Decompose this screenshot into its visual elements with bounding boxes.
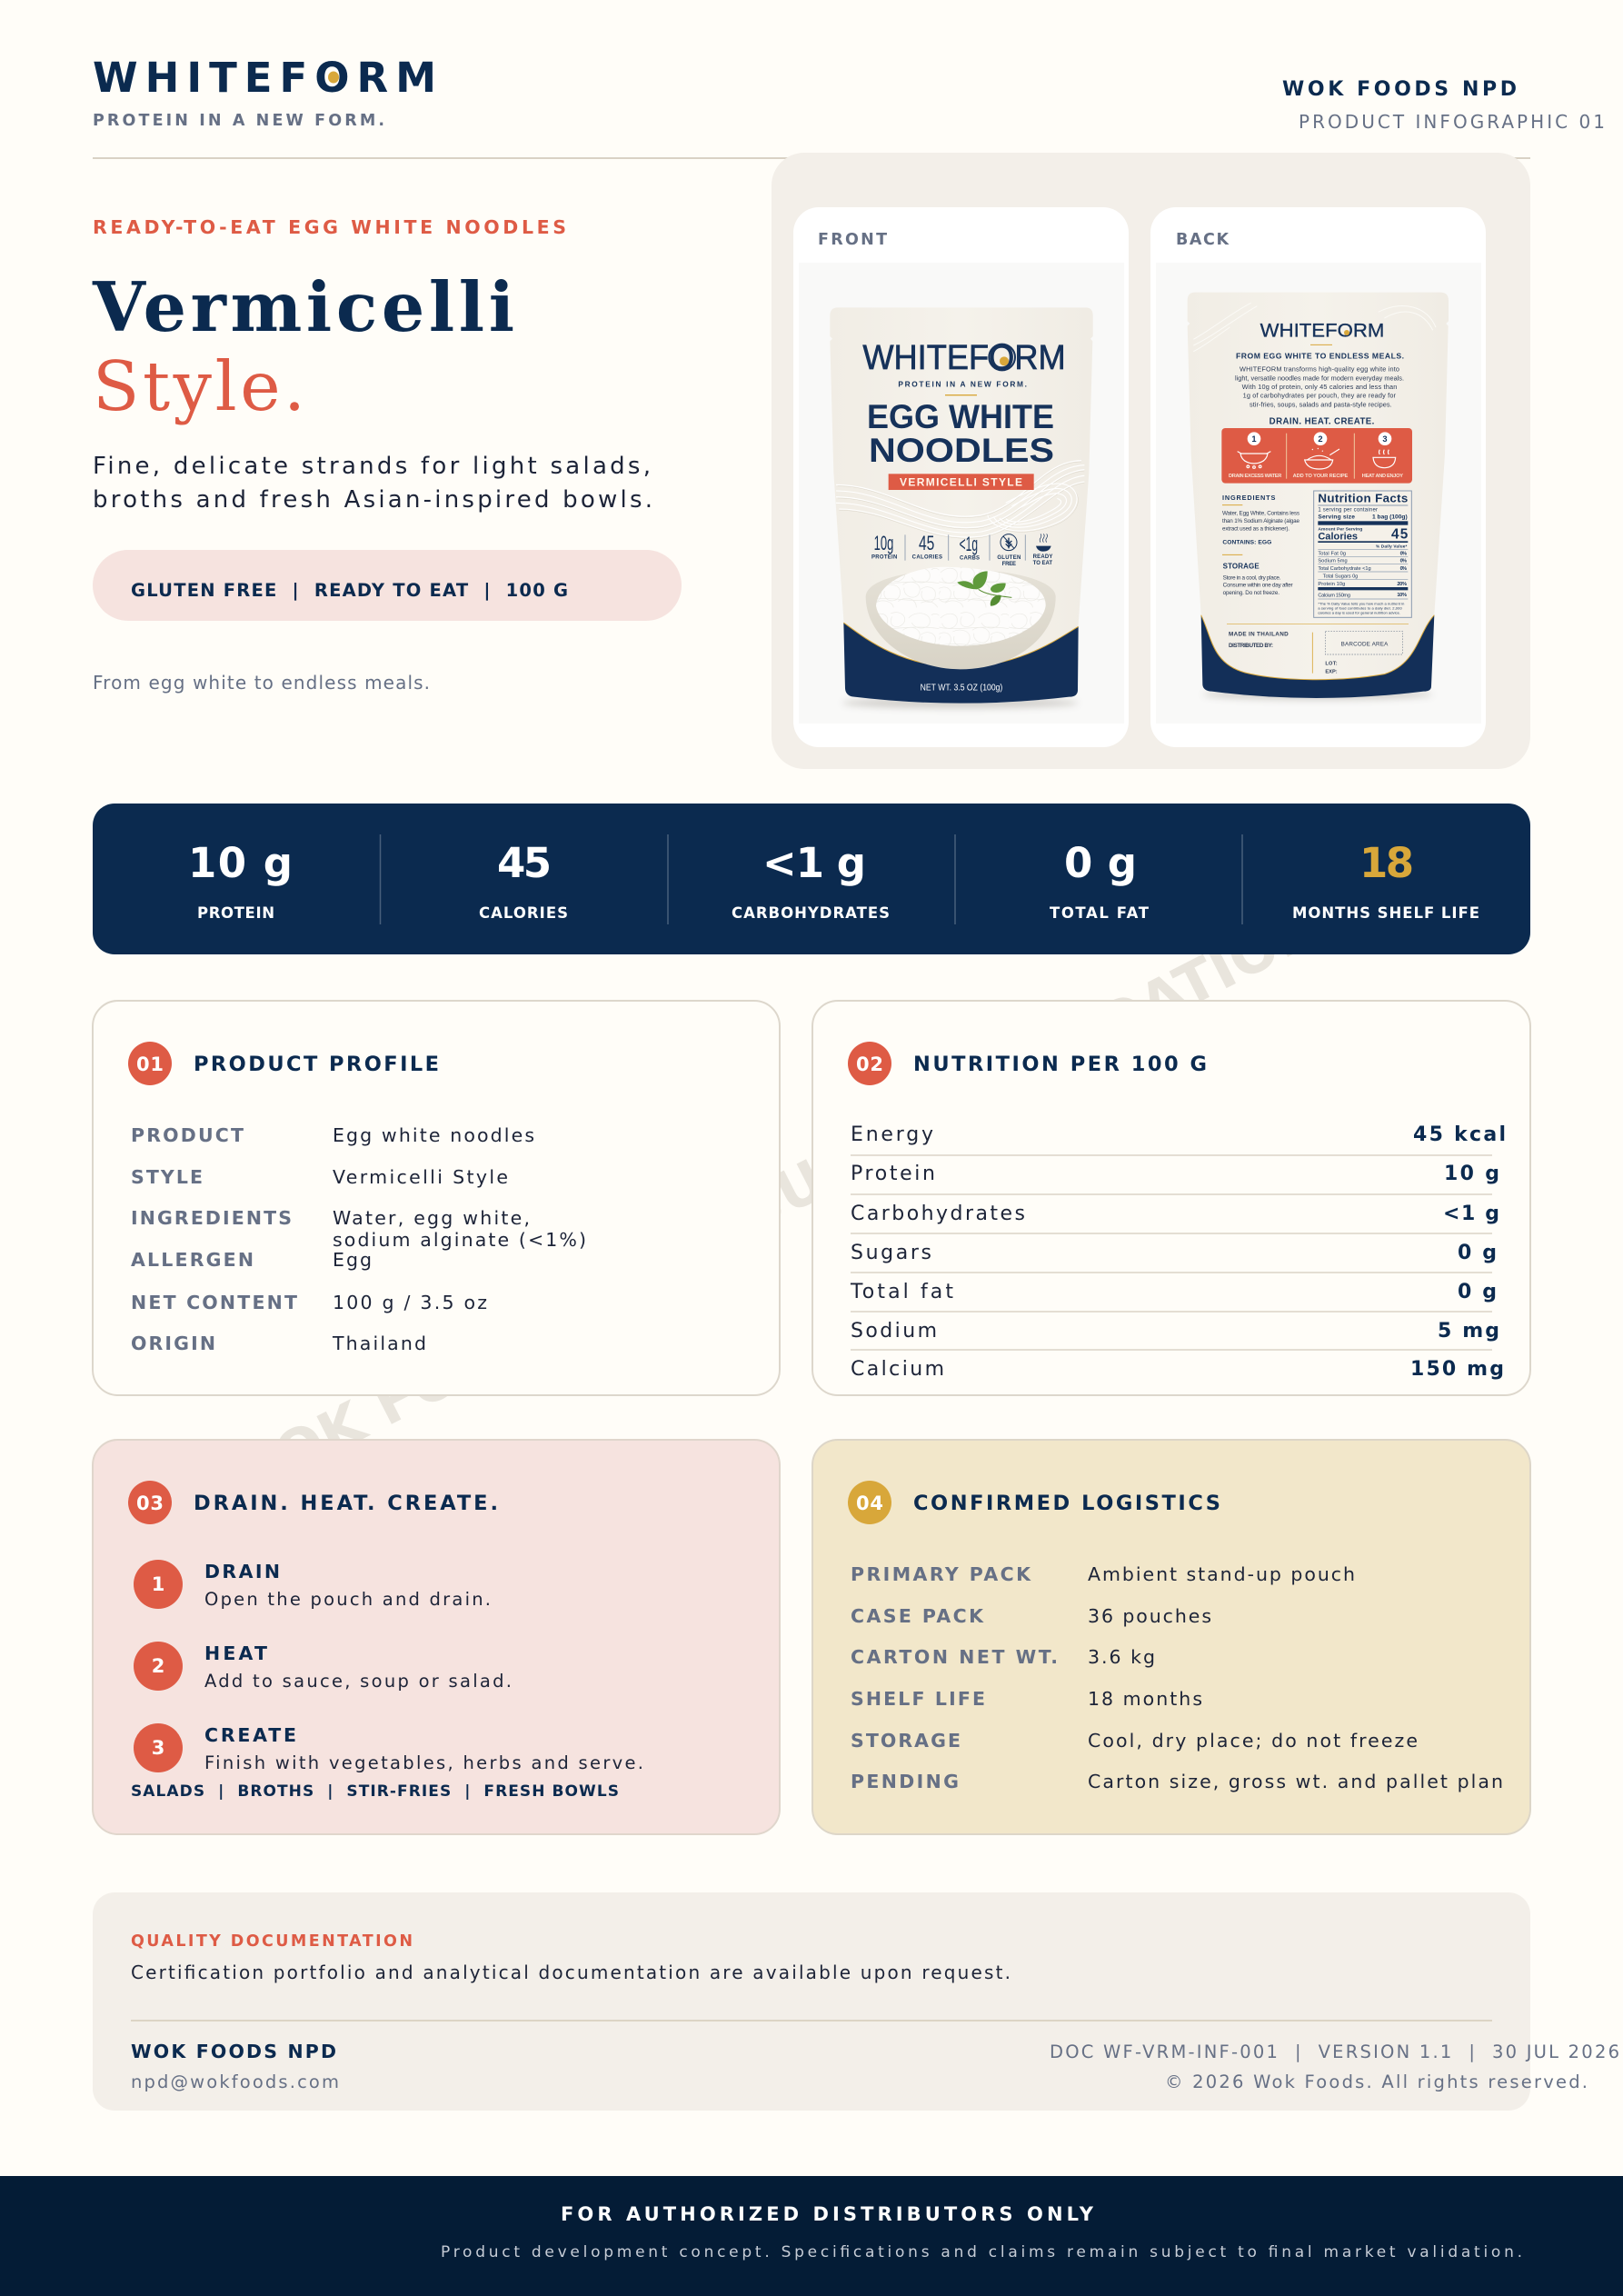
profile rows: ORIGIN	[131, 1333, 215, 1354]
logistics rows: 36 pouches	[1088, 1605, 1211, 1627]
step 2: Add to sauce, soup or salad.	[204, 1671, 512, 1692]
company contact	[131, 2041, 339, 2092]
panel: logistics	[812, 1440, 1530, 1834]
watermark	[209, 891, 1331, 1517]
nutrition facts label: 1 serving per container	[1318, 508, 1378, 514]
ingredients and storage: extract used as a thickener).	[1222, 525, 1289, 532]
heading: CONFIRMED LOGISTICS	[913, 1492, 1220, 1515]
pack base info: LOT:	[1325, 662, 1338, 667]
stat: carbohydrates: CARBOHYDRATES	[732, 904, 890, 922]
logistics rows: CASE PACK	[851, 1605, 984, 1627]
nutrition facts label: Nutrition Facts	[1318, 492, 1408, 505]
stat: protein: PROTEIN	[197, 904, 274, 922]
stat: protein	[188, 839, 293, 922]
nutrition table: 45 kcal	[1413, 1123, 1506, 1146]
heading: PRODUCT PROFILE	[194, 1053, 439, 1076]
profile rows: Vermicelli Style	[333, 1166, 508, 1188]
header brand: WHITEFORM	[93, 54, 436, 102]
nutrition table: 150 mg	[1410, 1358, 1504, 1381]
ingredients and storage: than 1% Sodium Alginate (algae	[1222, 518, 1299, 524]
nutrition facts label: 0%	[1400, 566, 1407, 572]
preparation strip: 3	[1382, 434, 1388, 444]
attribute pill	[93, 550, 682, 621]
quality text: Certification portfolio and analytical documentation are available upon request.	[131, 1962, 1011, 1983]
heading: NUTRITION PER 100 G	[913, 1053, 1207, 1076]
logistics rows: PRIMARY PACK	[851, 1563, 1031, 1585]
badge 04	[848, 1481, 891, 1524]
hero text: READY-TO-EAT EGG WHITE NOODLES	[93, 216, 566, 238]
step 3: 3	[152, 1737, 164, 1759]
step 2	[134, 1642, 512, 1692]
card: back: BACK	[1176, 231, 1230, 249]
step 1: DRAIN	[204, 1561, 280, 1582]
stat: total fat	[1050, 839, 1150, 922]
heading: DRAIN. HEAT. CREATE.	[194, 1492, 498, 1515]
hero tagline: From egg white to endless meals.	[93, 672, 430, 694]
preparation strip: 2	[1318, 434, 1323, 444]
ingredients and storage: STORAGE	[1223, 562, 1260, 570]
back pouch: WHITEFORM	[1260, 319, 1384, 342]
nutrition facts label: *The % Daily Value tells you how much a nutrient in	[1318, 601, 1404, 605]
header right label: WOK FOODS NPD	[1282, 78, 1517, 101]
front pouch	[830, 307, 1093, 708]
logo: WHITEFORM	[862, 338, 1066, 376]
footer band: Product development concept. Specifications and claims remain subject to final market validation.	[441, 2243, 1522, 2261]
stat: calories: CALORIES	[479, 904, 568, 922]
header brand	[93, 54, 436, 130]
ingredients and storage: Store in a cool, dry place.	[1223, 574, 1281, 581]
badge 01	[128, 1042, 172, 1085]
hero text	[92, 216, 652, 514]
nutrition table: Energy	[851, 1123, 933, 1146]
profile rows: sodium alginate (<1%)	[333, 1229, 586, 1251]
ingredients and storage: Water, Egg White, Contains less	[1222, 511, 1299, 517]
nutrition table: Protein	[851, 1163, 935, 1185]
front pouch: NET WT. 3.5 OZ (100g)	[921, 683, 1002, 693]
nutrition table: Total fat	[850, 1281, 953, 1303]
profile rows	[131, 1124, 586, 1354]
profile rows: Egg	[333, 1249, 372, 1271]
preparation strip: HEAT AND ENJOY	[1362, 474, 1403, 479]
document info	[1050, 2041, 1619, 2092]
preparation strip	[1221, 428, 1412, 484]
logistics rows: PENDING	[851, 1771, 959, 1792]
step 1	[134, 1560, 491, 1610]
pack base info: EXP:	[1325, 669, 1338, 674]
noodle bowl	[866, 567, 1056, 669]
pack claims: TO EAT	[1033, 561, 1052, 566]
profile rows: Thailand	[332, 1333, 426, 1354]
stat: shelf life: MONTHS SHELF LIFE	[1292, 904, 1479, 922]
step 1: 1	[152, 1573, 164, 1595]
logistics rows: Carton size, gross wt. and pallet plan	[1088, 1771, 1503, 1792]
logistics rows	[851, 1563, 1503, 1792]
pack claims: PROTEIN	[871, 555, 897, 561]
preparation strip: ADD TO YOUR RECIPE	[1293, 474, 1349, 479]
ingredients and storage: Consume within one day after	[1223, 583, 1293, 589]
front pouch: EGG WHITE	[867, 398, 1054, 435]
nutrition facts label: % Daily Value*	[1376, 544, 1408, 548]
pack base info: BARCODE AREA	[1341, 641, 1389, 647]
stat: calories	[479, 839, 568, 922]
stat: shelf life	[1292, 839, 1479, 922]
key stats bar	[93, 804, 1530, 954]
profile rows: 100 g / 3.5 oz	[333, 1292, 487, 1313]
nutrition facts label: Calcium 150mg	[1318, 594, 1350, 599]
nutrition facts label	[1314, 491, 1411, 617]
ingredients and storage: opening. Do not freeze.	[1223, 590, 1279, 596]
stat: total fat: TOTAL FAT	[1050, 904, 1150, 922]
footer band: FOR AUTHORIZED DISTRIBUTORS ONLY	[561, 2203, 1094, 2225]
badge 03	[128, 1481, 172, 1524]
front pouch: PROTEIN IN A NEW FORM.	[898, 380, 1027, 389]
front pouch: NOODLES	[869, 432, 1054, 469]
ingredients and storage: CONTAINS: EGG	[1222, 539, 1271, 545]
ingredients and storage: INGREDIENTS	[1222, 494, 1275, 502]
step 2: HEAT	[204, 1642, 267, 1664]
nutrition facts label: Calories	[1318, 532, 1358, 543]
pack claims: 45	[919, 532, 934, 554]
hero text: broths and fresh Asian-inspired bowls.	[93, 486, 652, 514]
pack claims: FREE	[1002, 562, 1016, 567]
hero text: Style.	[93, 346, 305, 426]
nutrition facts label: Total Carbohydrate <1g	[1318, 566, 1371, 572]
back copy: WHITEFORM transforms high-quality egg white into	[1240, 364, 1399, 373]
step 3: Finish with vegetables, herbs and serve.	[204, 1752, 643, 1773]
preparation strip: 1	[1251, 434, 1257, 444]
nutrition facts label: Amount Per Serving	[1318, 527, 1362, 533]
panel: quality documentation	[93, 1892, 1619, 2111]
nutrition facts label: Total Fat 0g	[1318, 552, 1346, 557]
noodle waves	[838, 462, 1084, 538]
pack claims: GLUTEN	[997, 555, 1021, 561]
nutrition table	[850, 1123, 1506, 1381]
document info: © 2026 Wok Foods. All rights reserved.	[1165, 2071, 1588, 2092]
nutrition table: Sugars	[851, 1242, 931, 1264]
nutrition facts label: Protein 10g	[1318, 582, 1345, 587]
stat: carbohydrates	[732, 839, 890, 922]
profile rows: PRODUCT	[131, 1124, 244, 1146]
badge 03: 03	[136, 1492, 164, 1514]
back copy: 1g of carbohydrates per pouch, they are ready for	[1243, 392, 1397, 400]
logistics rows: Ambient stand-up pouch	[1088, 1563, 1355, 1585]
header right label	[1282, 78, 1605, 133]
card: back	[1150, 207, 1486, 747]
step 2: 2	[152, 1655, 164, 1677]
header right label: PRODUCT INFOGRAPHIC 01	[1299, 111, 1605, 133]
pack claims: 10g	[874, 532, 893, 554]
pack claims: CALORIES	[912, 555, 942, 561]
panel: pack images	[772, 153, 1530, 769]
logistics rows: SHELF LIFE	[851, 1688, 985, 1710]
stat: calories: 45	[497, 839, 552, 887]
quality heading: QUALITY DOCUMENTATION	[131, 1932, 413, 1951]
nutrition facts label: 20%	[1397, 582, 1407, 587]
profile rows: NET CONTENT	[131, 1292, 297, 1313]
profile rows: INGREDIENTS	[131, 1207, 292, 1229]
profile rows: Egg white noodles	[333, 1124, 534, 1146]
logistics rows: Cool, dry place; do not freeze	[1088, 1730, 1418, 1752]
pack claims	[871, 532, 1052, 567]
logistics rows: 3.6 kg	[1088, 1646, 1155, 1668]
stat: protein: 10 g	[188, 839, 293, 887]
step 3	[134, 1723, 643, 1773]
panel: drain heat create	[93, 1440, 780, 1834]
footer band	[0, 2176, 1623, 2296]
hero text: Vermicelli	[92, 267, 514, 347]
nutrition table: Calcium	[851, 1358, 944, 1381]
nutrition table: Sodium	[851, 1320, 937, 1343]
watermark: VALIDATION	[962, 891, 1331, 1123]
nutrition facts label: 0%	[1400, 552, 1407, 557]
back pouch: DRAIN. HEAT. CREATE.	[1270, 417, 1375, 427]
nutrition table: Carbohydrates	[851, 1203, 1025, 1225]
nutrition facts label: 0%	[1400, 559, 1407, 564]
badge 02: 02	[856, 1053, 883, 1075]
header brand: PROTEIN IN A NEW FORM.	[93, 112, 384, 130]
back copy	[1235, 364, 1404, 409]
profile rows: ALLERGEN	[131, 1249, 254, 1271]
hero text: Fine, delicate strands for light salads,	[93, 453, 651, 480]
stat: carbohydrates: <1 g	[762, 839, 866, 887]
watermark: WOK FOODS	[209, 1279, 591, 1517]
pack base info	[1227, 624, 1409, 674]
nutrition facts label: 10%	[1397, 593, 1407, 598]
card: front: FRONT	[818, 231, 887, 249]
nutrition facts label: Serving size	[1318, 514, 1355, 520]
back copy: stir-fries, soups, salads and pasta-style recipes.	[1250, 401, 1392, 409]
nutrition facts label: 1 bag (100g)	[1372, 514, 1408, 520]
step 3: CREATE	[204, 1724, 296, 1746]
panel: product profile	[93, 1001, 780, 1395]
back copy: light, versatile noodles made for modern everyday meals.	[1235, 374, 1404, 382]
panel: nutrition	[812, 1001, 1530, 1395]
back copy: With 10g of protein, only 45 calories and less than	[1242, 383, 1397, 391]
pack base info: DISTRIBUTED BY:	[1229, 643, 1273, 649]
ingredients and storage	[1222, 494, 1299, 596]
back pouch: FROM EGG WHITE TO ENDLESS MEALS.	[1236, 352, 1404, 361]
logistics rows: 18 months	[1088, 1688, 1202, 1710]
profile rows: Water, egg white,	[333, 1207, 530, 1229]
nutrition table: 10 g	[1444, 1163, 1499, 1185]
pack base info: MADE IN THAILAND	[1229, 631, 1289, 637]
nutrition facts label: Sodium 5mg	[1318, 559, 1348, 564]
front pouch: VERMICELLI STYLE	[900, 475, 1022, 488]
step 1: Open the pouch and drain.	[204, 1589, 491, 1610]
badge 04: 04	[856, 1492, 883, 1514]
attribute pill: GLUTEN FREE | READY TO EAT | 100 G	[131, 580, 568, 601]
nutrition table: <1 g	[1443, 1203, 1499, 1225]
company contact: npd@wokfoods.com	[131, 2071, 339, 2092]
nutrition table: 0 g	[1458, 1281, 1497, 1303]
back pouch	[1188, 293, 1449, 700]
badge 02	[848, 1042, 891, 1085]
badge 01: 01	[136, 1053, 164, 1075]
stat: shelf life: 18	[1359, 839, 1414, 887]
pack claims: READY	[1033, 554, 1052, 560]
nutrition table: 0 g	[1458, 1242, 1497, 1264]
nutrition facts label: 45	[1391, 527, 1409, 543]
nutrition table: 5 mg	[1438, 1320, 1499, 1343]
watermark: SUBJECT TO	[729, 1015, 1092, 1244]
use cases: SALADS | BROTHS | STIR-FRIES | FRESH BOWLS	[131, 1782, 619, 1801]
nutrition facts label: calories a day is used for general nutrition advice.	[1318, 610, 1400, 614]
company contact: WOK FOODS NPD	[131, 2041, 336, 2062]
nutrition facts label: a serving of food contributes to a daily diet. 2,000	[1318, 605, 1402, 610]
card: front	[793, 207, 1129, 747]
preparation strip: DRAIN EXCESS WATER	[1229, 474, 1281, 479]
nutrition facts label: Total Sugars 0g	[1323, 574, 1358, 579]
pack claims: <1g	[960, 533, 978, 555]
profile rows: STYLE	[131, 1166, 203, 1188]
logistics rows: STORAGE	[851, 1730, 961, 1752]
logistics rows: CARTON NET WT.	[851, 1646, 1058, 1668]
pack claims: CARBS	[960, 555, 980, 561]
stat: total fat: 0 g	[1064, 839, 1137, 887]
document info: DOC WF-VRM-INF-001 | VERSION 1.1 | 30 JUL 2026	[1050, 2041, 1619, 2062]
